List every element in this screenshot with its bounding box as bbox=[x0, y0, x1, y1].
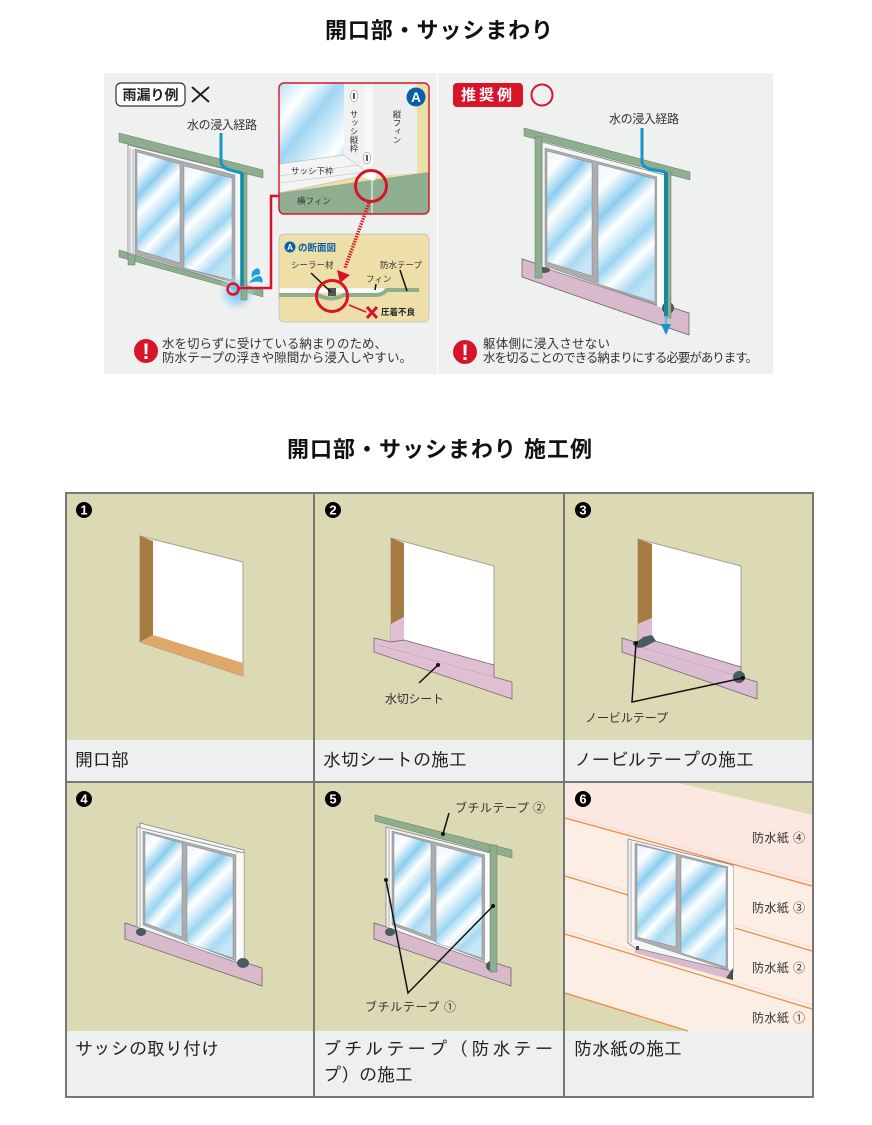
badge: 1: 1 bbox=[80, 502, 88, 518]
leader lines bbox=[632, 641, 745, 702]
caption: ノービルテープの施工 bbox=[574, 750, 754, 770]
callout: left warning: 防水テープの浮きや隙間から浸入しやすい。 bbox=[162, 350, 412, 365]
illustration: butyl tape on sash bbox=[374, 815, 512, 986]
detail box: cross section bbox=[279, 234, 429, 322]
panel: step 1 bbox=[65, 492, 314, 782]
caption: 開口部 bbox=[75, 750, 129, 770]
label: no-bill tape: ノービルテープ bbox=[585, 711, 668, 725]
label: sash lower frame: サッシ下枠 bbox=[291, 166, 334, 176]
badge: 3: 3 bbox=[579, 502, 587, 518]
label: fin: フィン bbox=[366, 274, 391, 284]
panel: step 2 bbox=[314, 492, 564, 782]
label: vertical fin: 縦フィン bbox=[392, 109, 402, 144]
label: waterproof tape: 防水テープ bbox=[380, 260, 422, 270]
callout: left warning bbox=[134, 336, 412, 365]
illustration: opening bbox=[140, 536, 243, 676]
connector: red leader line bbox=[228, 196, 279, 294]
badge: 6 bbox=[575, 791, 591, 807]
table: construction steps bbox=[65, 492, 813, 1097]
badge: 2 bbox=[325, 502, 341, 518]
callout: right warning: 躯体側に浸入させない bbox=[483, 336, 610, 351]
badge: 2: 2 bbox=[329, 502, 337, 518]
leader line: tape 2 bbox=[441, 813, 449, 836]
detail box A bbox=[279, 83, 429, 214]
panel: step 4 bbox=[65, 782, 314, 1097]
arrow: water drains bbox=[661, 316, 671, 335]
callout: right warning: 水を切ることのできる納まりにする必要があります。 bbox=[483, 350, 758, 365]
icon: cross mark bbox=[192, 87, 209, 102]
illustration: flashing sheet bbox=[374, 538, 512, 699]
label: paper 4: 防水紙 ④ bbox=[752, 830, 805, 845]
illustration: waterproof paper layers bbox=[565, 783, 812, 1031]
panel: step 5 bbox=[314, 782, 564, 1097]
leader lines: tape 1 bbox=[384, 878, 495, 993]
diagram: section band bbox=[279, 270, 419, 298]
label: water path: 水の浸入経路 bbox=[609, 111, 679, 126]
label: horizontal fin: 横フィン bbox=[297, 196, 331, 206]
label: paper 2: 防水紙 ② bbox=[752, 960, 805, 975]
callout: right warning bbox=[453, 336, 758, 365]
panel: recommended example bbox=[438, 73, 773, 374]
title: top heading: 開口部・サッシまわり bbox=[325, 18, 553, 43]
title: construction example heading: 開口部・サッシまわり 施工例 bbox=[287, 437, 592, 462]
badge: A bbox=[406, 88, 426, 106]
label: butyl tape 2: ブチルテープ ② bbox=[455, 800, 545, 815]
callout: left warning: 水を切らずに受けている納まりのため、 bbox=[162, 336, 387, 351]
caption: サッシの取り付け bbox=[75, 1039, 219, 1059]
badge and heading: section of A bbox=[284, 242, 336, 254]
badge: 6: 6 bbox=[579, 792, 587, 806]
badge: 5: 5 bbox=[329, 792, 337, 806]
leader line bbox=[419, 663, 440, 683]
illustration: recommended window bbox=[522, 128, 690, 335]
badge and heading: section of A: の断面図 bbox=[298, 242, 336, 254]
badge: 1 bbox=[76, 502, 92, 518]
illustration: butyl tape corners bbox=[622, 539, 757, 699]
label: sealant: シーラー材 bbox=[291, 260, 334, 270]
badge: A: A bbox=[411, 90, 421, 105]
badge: 3 bbox=[575, 502, 591, 518]
arrow: dotted red bbox=[337, 203, 369, 283]
label: paper 3: 防水紙 ③ bbox=[752, 900, 805, 915]
label: butyl tape 1: ブチルテープ ① bbox=[365, 999, 456, 1014]
caption bbox=[323, 1039, 553, 1085]
badge: recommended: 推奨例 bbox=[461, 86, 515, 104]
caption: 防水紙の施工 bbox=[574, 1039, 682, 1059]
highlight: red circle bbox=[356, 170, 386, 202]
icon: water droplets bbox=[249, 268, 263, 283]
badge: rain leak label bbox=[116, 83, 185, 106]
badge and heading: section of A: A bbox=[287, 243, 293, 252]
icon: circle mark bbox=[532, 84, 552, 106]
mark: poor bonding bbox=[349, 305, 416, 318]
label: flashing sheet: 水切シート bbox=[385, 692, 444, 706]
caption: 水切シートの施工 bbox=[323, 750, 467, 770]
callout: right warning: ! bbox=[461, 340, 469, 365]
label: paper 1: 防水紙 ① bbox=[752, 1010, 805, 1025]
highlight: red circle bbox=[316, 280, 348, 312]
badge: 4 bbox=[76, 791, 92, 807]
label: water path: 水の浸入経路 bbox=[187, 117, 257, 132]
illustration: sash installed bbox=[125, 823, 262, 986]
badge: 5 bbox=[325, 791, 341, 807]
badge: 4: 4 bbox=[80, 792, 88, 806]
label: sash vertical frame: サッシ縦枠 bbox=[349, 110, 359, 153]
illustration: leaking window bbox=[119, 133, 263, 312]
panel: step 3 bbox=[564, 492, 813, 782]
panel: step 6 bbox=[564, 782, 813, 1097]
mark: poor bonding: 圧着不良 bbox=[381, 307, 416, 317]
badge: recommended bbox=[453, 83, 523, 107]
caption: ブチルテープ（防水テー bbox=[323, 1039, 553, 1059]
callout: left warning: ! bbox=[142, 339, 150, 364]
badge: rain leak label: 雨漏り例 bbox=[122, 87, 178, 103]
panel: rain leak example bbox=[104, 73, 437, 374]
caption: プ）の施工 bbox=[323, 1065, 413, 1085]
